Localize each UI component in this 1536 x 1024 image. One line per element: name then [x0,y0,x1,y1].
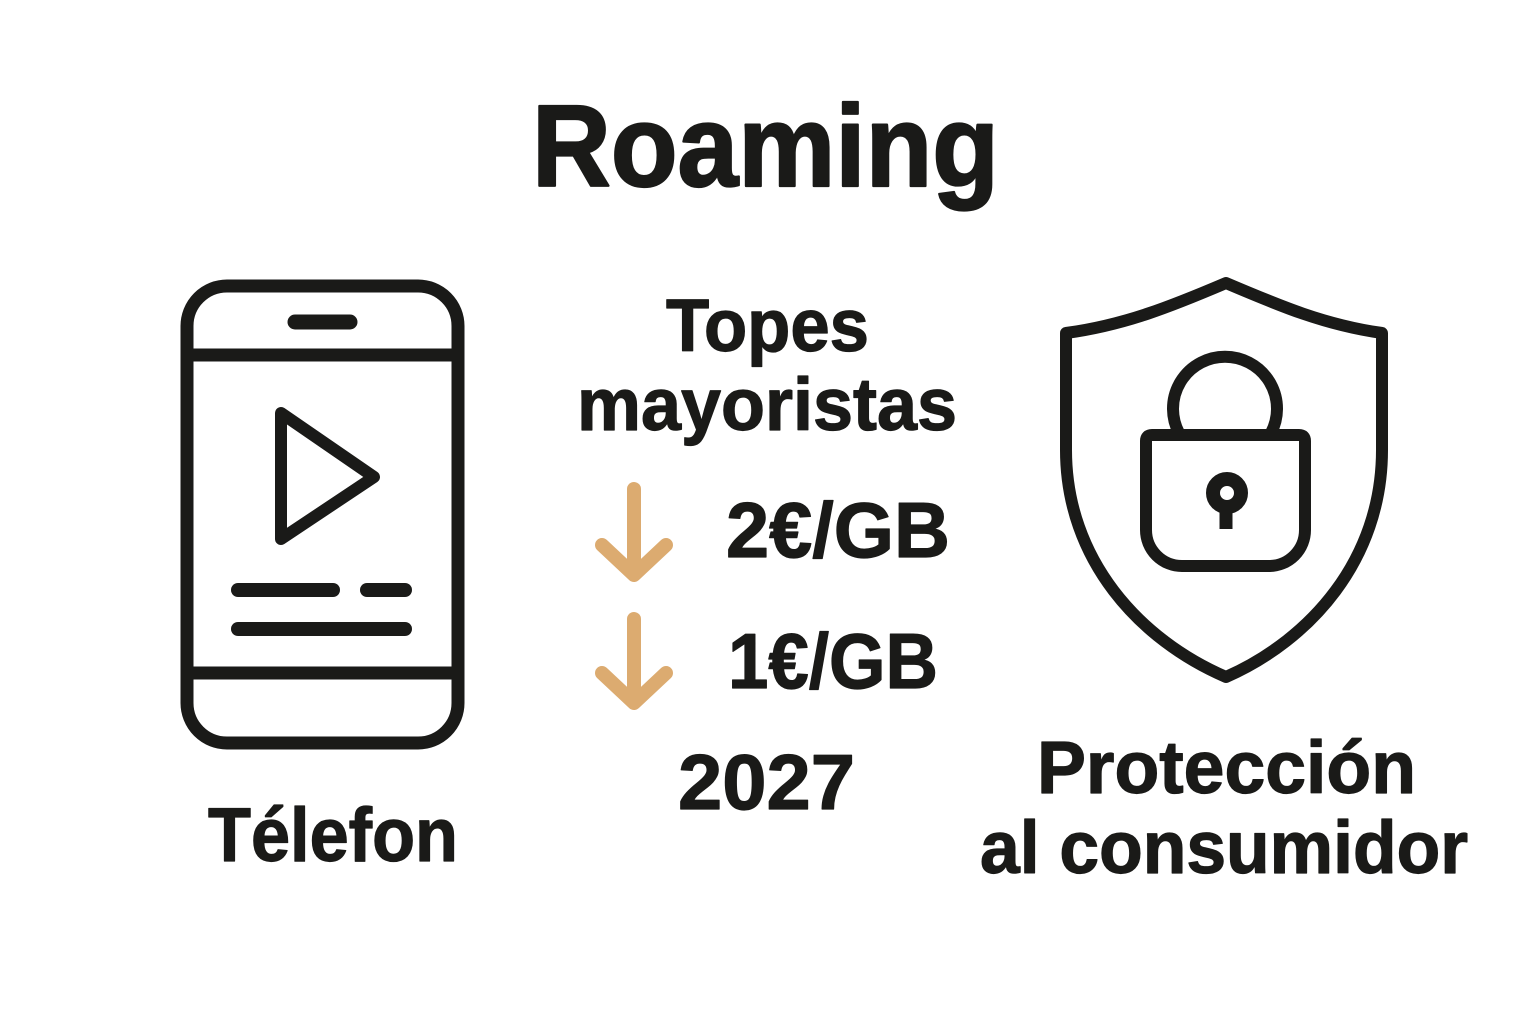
keyhole [1213,479,1241,529]
content lines [238,590,405,629]
shield label [980,726,1468,889]
price: 1 euro per GB: 1€/GB [728,617,938,705]
play button [281,413,374,539]
title: Roaming [532,81,999,211]
phone label: Télefon [208,793,458,878]
padlock shackle [1173,357,1277,433]
center heading: mayoristas [577,363,957,446]
shield label: al consumidor [980,806,1468,889]
phone speaker [295,314,350,330]
shield label: Protección [1037,726,1416,809]
icon: shield with padlock [1066,283,1382,677]
phone top bar [187,348,458,362]
center heading: Topes [666,284,869,367]
center heading [577,284,957,446]
padlock body [1146,435,1305,566]
shield outline [1066,283,1382,677]
phone bottom bar [187,666,458,680]
icon: smartphone [187,286,458,743]
arrow: down to 2 euro [602,489,666,575]
price: 2 euro per GB: 2€/GB [726,486,950,574]
arrow: down to 1 euro [602,619,666,703]
year: 2027 [678,738,855,826]
phone body [187,286,458,743]
